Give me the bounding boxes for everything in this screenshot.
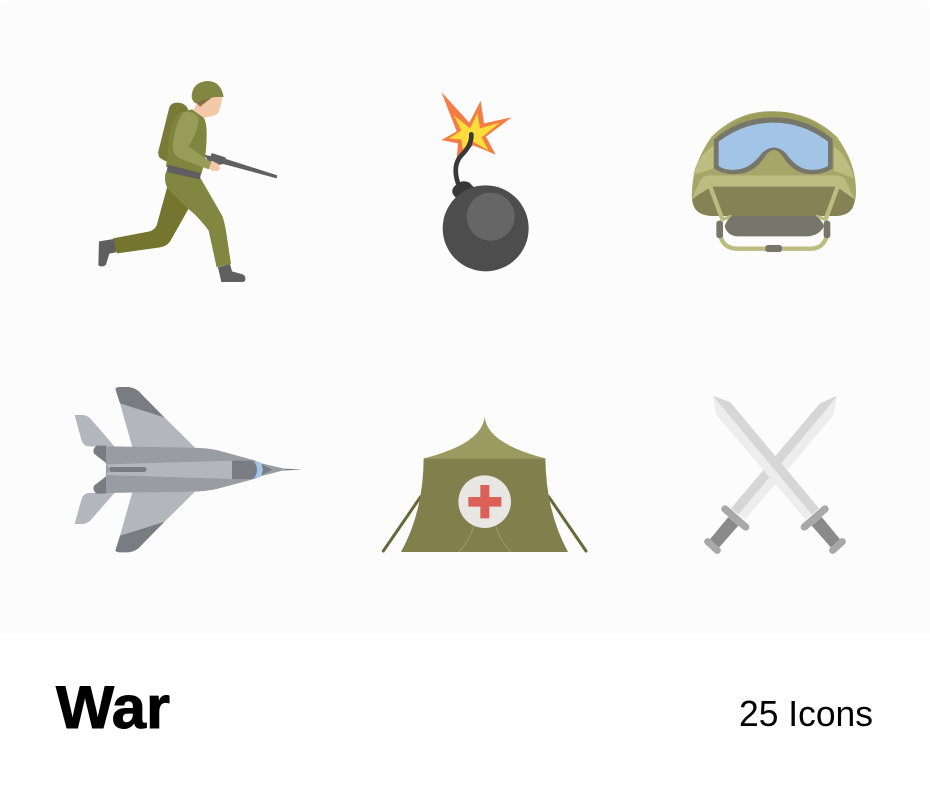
nose <box>260 463 287 476</box>
rear leg <box>113 187 189 253</box>
sword leaning right: blade <box>731 396 837 520</box>
buckles <box>716 221 723 238</box>
red cross <box>468 485 501 518</box>
torso <box>166 109 207 174</box>
neck cap <box>452 181 474 199</box>
explosion inner <box>449 113 500 151</box>
side bands <box>693 146 713 175</box>
straps <box>710 186 723 220</box>
fuse <box>456 134 471 183</box>
explosion outer <box>441 92 512 159</box>
sword leaning right: pommel <box>708 542 717 550</box>
belt <box>167 165 201 179</box>
wing tips <box>115 387 165 418</box>
hand <box>209 161 220 171</box>
door seams <box>459 525 511 552</box>
icon: bomb with lit fuse <box>441 92 529 271</box>
cockpit <box>232 461 259 479</box>
roof <box>424 416 545 458</box>
canvas <box>401 458 568 552</box>
sword leaning left: blade <box>713 396 819 520</box>
centre spine <box>106 461 233 479</box>
highlight <box>467 193 515 241</box>
engine nozzles <box>93 446 106 463</box>
goggle frame <box>714 117 833 174</box>
sword leaning left: grip <box>812 517 840 548</box>
tail fins <box>75 415 115 447</box>
icon count: 25 Icons <box>739 693 873 734</box>
icon: medical tent <box>383 416 586 552</box>
sword leaning left: pommel <box>833 542 842 550</box>
sword leaning right: guard <box>725 509 746 527</box>
icon: running soldier with rifle <box>98 81 277 282</box>
icon: combat helmet with goggles <box>692 111 856 252</box>
fuselage <box>106 446 257 493</box>
interior <box>693 185 855 216</box>
bomb body <box>443 185 529 271</box>
front boot <box>218 264 245 282</box>
neck pad <box>725 216 824 236</box>
front leg and hips <box>165 172 231 267</box>
rifle <box>203 153 277 178</box>
brim <box>692 175 855 199</box>
backpack <box>158 103 189 163</box>
sleeve <box>173 112 211 169</box>
shell <box>692 111 856 216</box>
hair under helmet <box>195 97 212 107</box>
sword leaning left: guard <box>804 509 825 527</box>
canopy ring <box>254 461 263 478</box>
helmet <box>192 81 224 103</box>
sword leaning right: grip <box>710 517 738 548</box>
title: War <box>56 674 170 741</box>
goggle lens <box>719 123 828 170</box>
chin strap <box>720 235 827 249</box>
icon: crossed swords <box>708 396 842 550</box>
icon: fighter jet <box>75 387 303 552</box>
rear boot <box>98 239 116 267</box>
face and neck <box>193 97 223 118</box>
emblem disc <box>458 475 511 528</box>
wings <box>120 403 195 448</box>
guy ropes <box>383 497 586 551</box>
top dome <box>715 111 833 143</box>
dorsal slot <box>109 467 146 472</box>
nose probe <box>283 469 303 471</box>
